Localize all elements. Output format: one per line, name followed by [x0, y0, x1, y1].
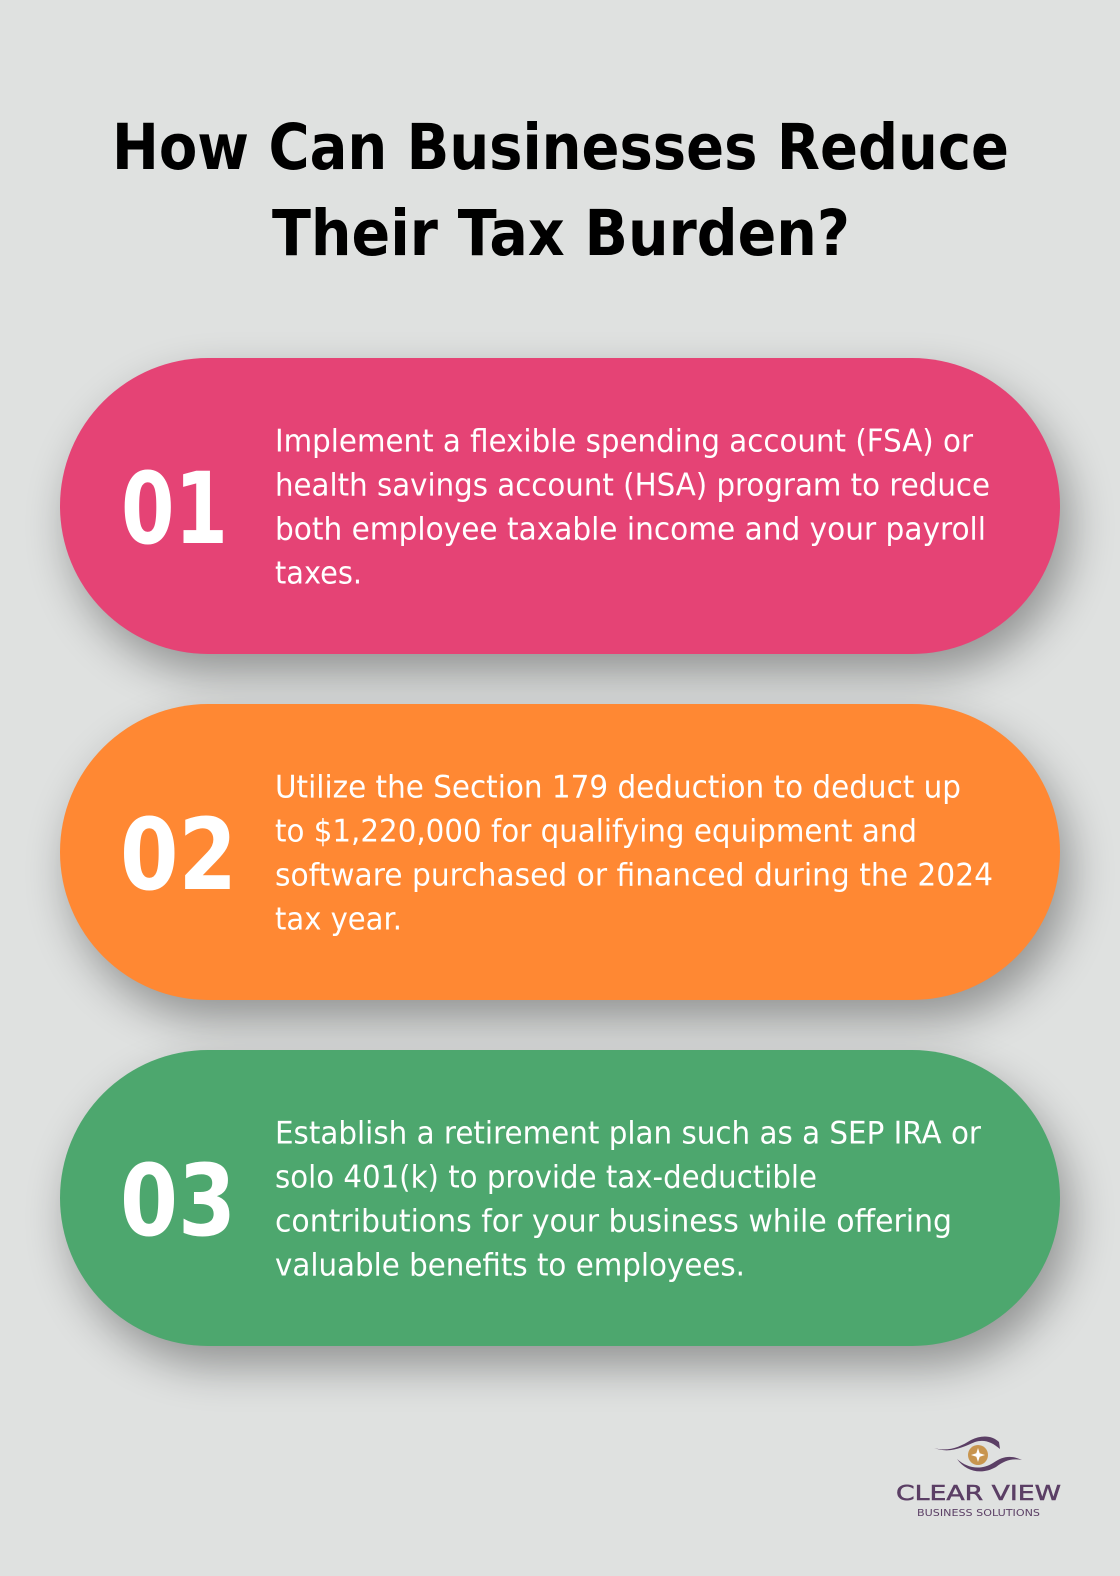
text block: step 02: software purchased or financed during the 2024	[275, 858, 993, 894]
text block: step 03: contributions for your business while offering	[275, 1204, 952, 1240]
text block: step 02: to $1,220,000 for qualifying equipment and	[275, 814, 917, 850]
text block: step 03	[275, 1116, 981, 1284]
panel: step 01	[60, 358, 1070, 674]
text block: step 01: health savings account (HSA) program to reduce	[275, 468, 990, 504]
icon: eye swooshes	[934, 1436, 1022, 1471]
text block: step 01: taxes.	[275, 556, 362, 592]
text block: step 03: Establish a retirement plan such as a SEP IRA or	[275, 1116, 981, 1152]
pill background: orange	[60, 704, 1060, 1000]
text block: step 02: tax year.	[275, 902, 402, 938]
text block: step 03: solo 401(k) to provide tax-deductible	[275, 1160, 817, 1196]
text block: step 01	[275, 424, 990, 592]
pill background: pink	[60, 358, 1060, 654]
number 03: 03	[120, 1144, 236, 1259]
text block: step 02	[275, 770, 993, 938]
text block: step 02: Utilize the Section 179 deduction to deduct up	[275, 770, 961, 806]
number 02: 02	[120, 798, 237, 913]
text block: step 01: both employee taxable income and your payroll	[275, 512, 986, 548]
number 01: 01	[121, 452, 228, 567]
title: Their Tax Burden?	[272, 197, 850, 270]
panel: step 02	[60, 704, 1070, 1020]
text block: step 03: valuable benefits to employees.	[275, 1248, 745, 1284]
title	[112, 111, 1009, 270]
logo tagline: BUSINESS SOLUTIONS	[917, 1508, 1040, 1519]
logo: Clear View Business Solutions	[896, 1436, 1061, 1519]
icon: gold star circle	[968, 1445, 988, 1465]
text block: step 01: Implement a flexible spending account (FSA) or	[275, 424, 973, 460]
logo wordmark: CLEAR VIEW	[896, 1481, 1061, 1505]
title: How Can Businesses Reduce	[112, 111, 1009, 184]
pill background: green	[60, 1050, 1060, 1346]
panel: step 03	[60, 1050, 1070, 1366]
